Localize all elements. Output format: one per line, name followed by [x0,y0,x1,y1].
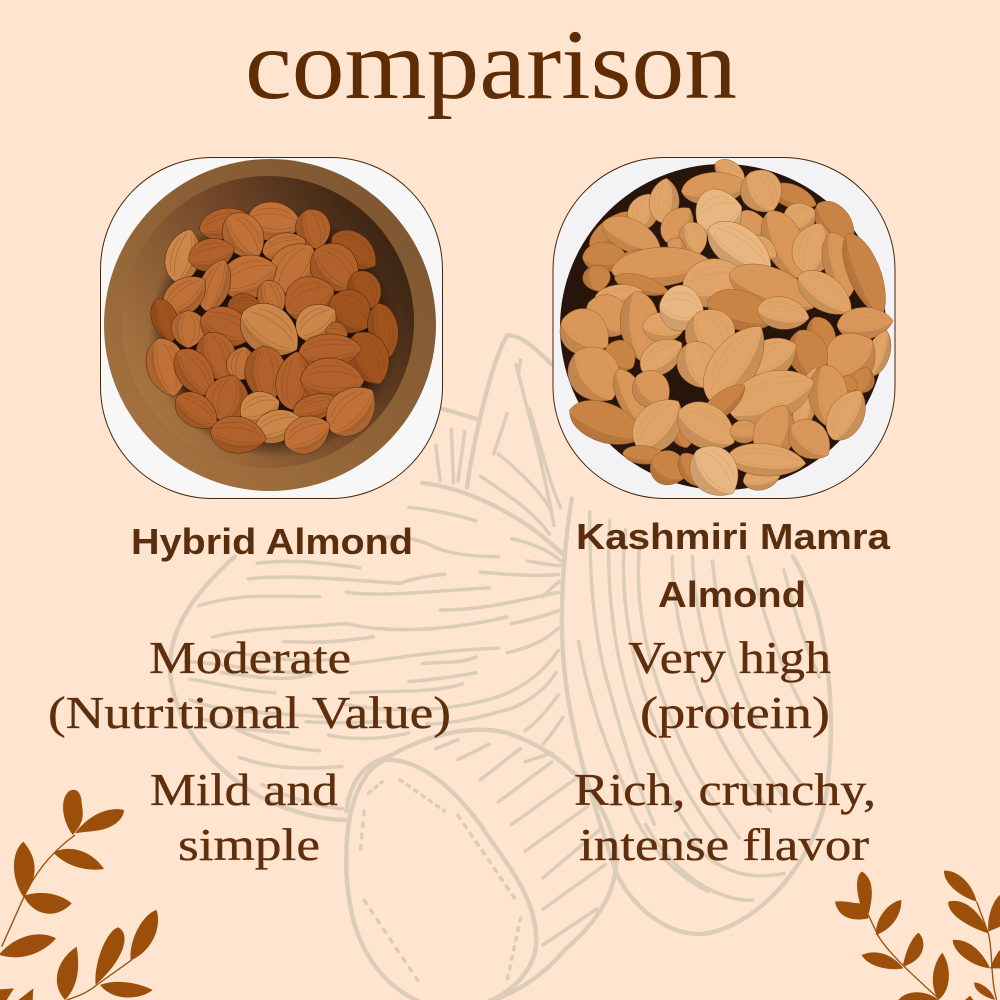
wooden bowl [104,159,436,491]
bowl interior [560,164,886,490]
photo outline: left [100,158,442,498]
photo: kashmiri mamra almonds in white bowl [551,154,897,508]
heading: kashmiri mamra almond: Kashmiri Mamra [576,516,891,557]
heading: hybrid almond: Hybrid Almond [131,521,413,562]
text: hybrid flavor: Mild and [150,764,338,815]
decoration: leaves bottom left [0,790,158,1000]
text: mamra protein [628,632,831,738]
watermark: almond line drawing [170,335,831,1000]
title: comparison [245,9,737,120]
decoration: leaves bottom right [835,871,1000,1000]
text: hybrid flavor [150,764,338,870]
text: hybrid nutritional value: Moderate [149,632,351,683]
text: mamra flavor: intense flavor [579,819,869,870]
text: hybrid nutritional value [48,632,451,738]
photo: hybrid almonds in wooden bowl [100,157,443,499]
text: mamra protein: (protein) [640,687,830,738]
text: mamra flavor [574,764,876,870]
heading: kashmiri mamra almond [576,516,891,615]
mamra almonds [551,154,897,508]
photo outline: right [553,158,895,498]
hybrid almonds [140,200,403,461]
text: mamra protein: Very high [628,632,831,683]
text: hybrid flavor: simple [178,819,320,870]
text: hybrid nutritional value: (Nutritional Value) [48,687,451,738]
text: mamra flavor: Rich, crunchy, [574,764,876,815]
heading: kashmiri mamra almond: Almond [658,574,806,615]
